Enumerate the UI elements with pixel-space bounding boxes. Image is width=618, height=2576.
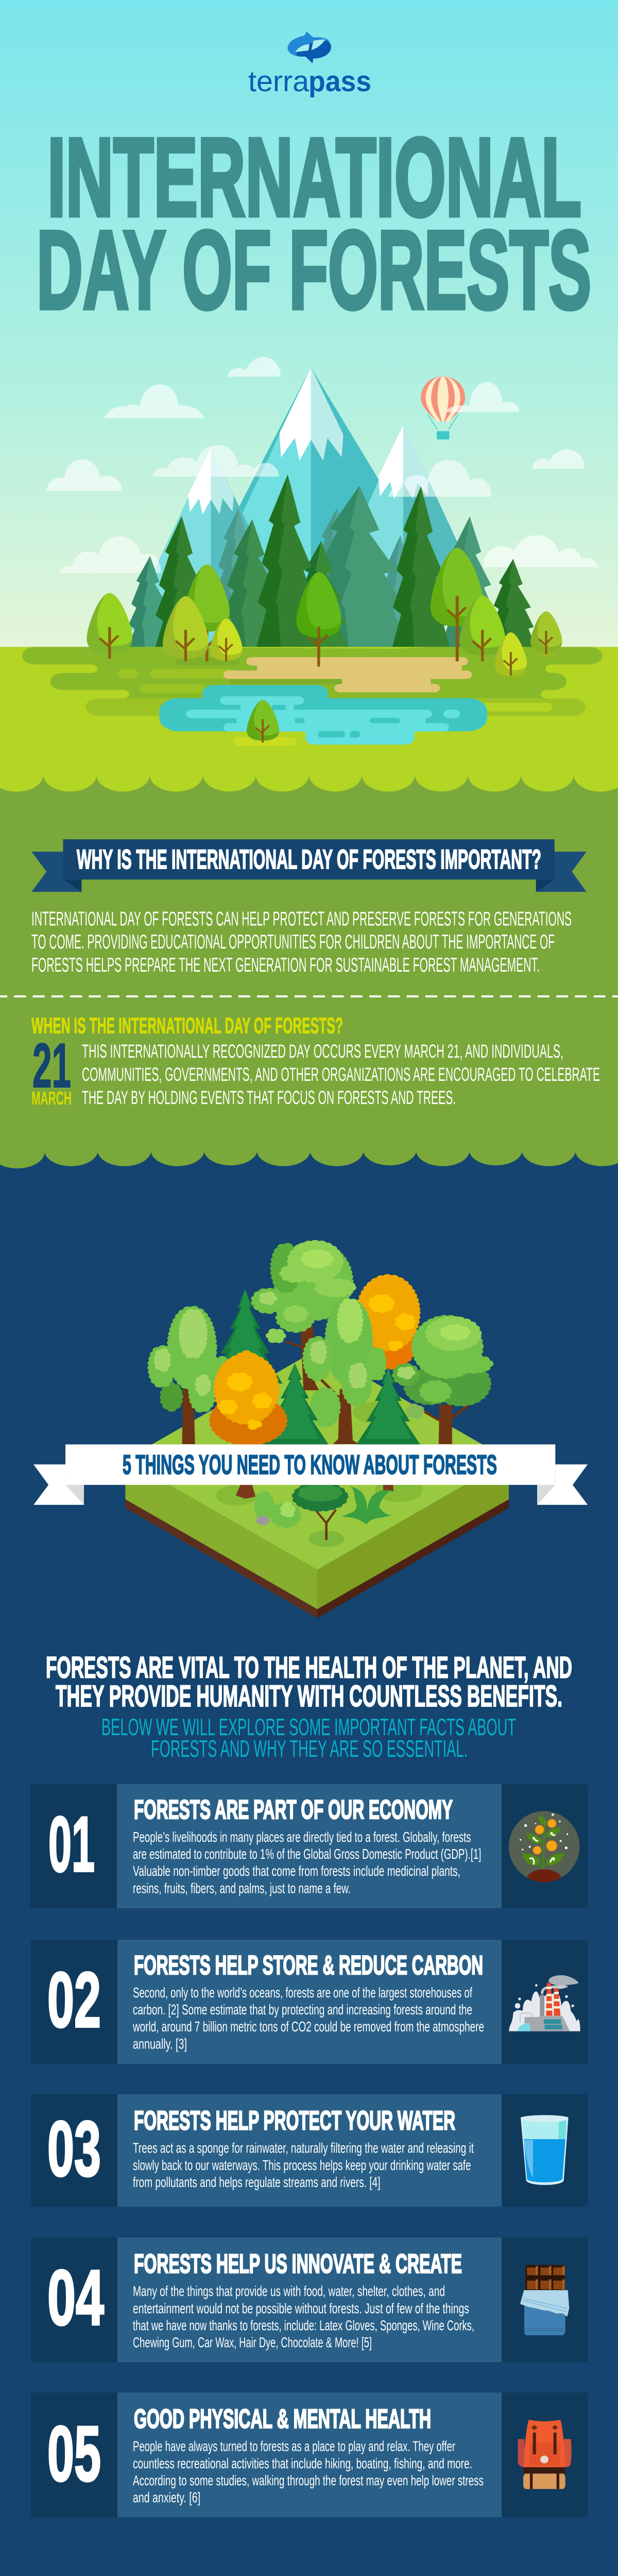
pine: middle [260, 1363, 330, 1447]
clouds back [47, 357, 598, 567]
number 05: 05 [47, 2410, 101, 2498]
logo: terrapass top [248, 31, 371, 98]
icon: factory [509, 1975, 580, 2031]
icon: backpack [518, 2420, 572, 2489]
body 03: from pollutants and helps regulate streams and rivers. [4] [133, 2174, 380, 2190]
land block [125, 1349, 509, 1618]
body 01: resins, fruits, fibers, and palms, just to name a few. [133, 1880, 351, 1896]
illustration: mountain landscape [0, 357, 618, 789]
body 04 [133, 2283, 474, 2350]
sky background [0, 0, 618, 647]
ground [0, 647, 618, 789]
body 04: entertainment would not be possible without forests. Just of few of the things [133, 2300, 469, 2316]
lime scallops over green [0, 754, 618, 791]
tree: top centre [255, 1243, 352, 1390]
clouds front [59, 445, 491, 573]
heading 05: GOOD PHYSICAL & MENTAL HEALTH [134, 2404, 431, 2434]
tree: tall centre [307, 1301, 382, 1444]
tree: orange front [214, 1353, 283, 1443]
lake [159, 685, 487, 744]
leafy trees [87, 548, 562, 742]
panel: card 02 [31, 1940, 588, 2064]
logo wordmark: pass [308, 65, 371, 98]
body 05: countless recreational activities that include hiking, boating, fishing, and more. [133, 2455, 472, 2471]
tree: left [152, 1309, 226, 1444]
banner: why is it important [31, 839, 587, 892]
number 02: 02 [47, 1956, 101, 2044]
illustration: isometric forest [125, 1243, 509, 1618]
mountain: right [315, 426, 494, 622]
number 03: 03 [47, 2105, 101, 2193]
ribbon: 5 things [33, 1445, 588, 1505]
icon: glass of water [521, 2115, 569, 2185]
ground plants [236, 1485, 393, 1540]
body 03 [133, 2140, 474, 2190]
date: 21 march: 21 [32, 1030, 71, 1100]
panel: green section [0, 772, 618, 1168]
heading: forests are vital [46, 1651, 572, 1713]
tree: orange back [360, 1277, 416, 1373]
title [37, 114, 591, 332]
heading: when: WHEN IS THE INTERNATIONAL DAY OF FORESTS? [31, 1013, 343, 1039]
mountain: left [126, 448, 300, 630]
text block: when body [82, 1041, 600, 1108]
icon: chocolate bar [520, 2265, 569, 2335]
icon: money tree [509, 1811, 579, 1882]
hot air balloon [421, 377, 465, 439]
green ground patches [22, 647, 603, 716]
panel: card 04 [31, 2238, 588, 2362]
navy section base [0, 1133, 618, 2576]
path: sand [224, 657, 472, 692]
body 04: Many of the things that provide us with food, water, shelter, clothes, and [133, 2283, 445, 2299]
panel: card 03 [31, 2094, 588, 2207]
logo wordmark: terra [248, 65, 309, 98]
body 04: Chewing Gum, Car Wax, Hair Dye, Chocolate & More! [5] [133, 2334, 372, 2350]
conifer forest [127, 474, 537, 659]
body 05: and anxiety. [6] [133, 2489, 200, 2505]
date: 21 march: MARCH [31, 1088, 72, 1109]
body 01: Valuable non-timber goods that come from forests include medicinal plants, [133, 1863, 460, 1879]
text block: why important body [31, 908, 572, 976]
date: 21 march [31, 1030, 72, 1109]
number 01: 01 [48, 1801, 95, 1888]
body 02 [132, 1985, 484, 2052]
body 01 [133, 1829, 481, 1896]
mountain: main [165, 367, 465, 649]
body 05: People have always turned to forests as a place to play and relax. They offer [133, 2438, 455, 2454]
subheading: explore [101, 1714, 516, 1762]
tree: right [397, 1318, 489, 1444]
logo wordmark [248, 65, 371, 98]
shadows under trees [177, 651, 555, 746]
pine: back left [208, 1289, 283, 1384]
icon: terrapass swirl [288, 31, 331, 63]
body 05 [133, 2438, 484, 2505]
panel: card 01 [30, 1784, 588, 1908]
panel: card 05 [31, 2393, 588, 2517]
pine: right [355, 1368, 422, 1447]
number 04: 04 [47, 2254, 104, 2342]
body 02: annually. [3] [133, 2036, 187, 2052]
